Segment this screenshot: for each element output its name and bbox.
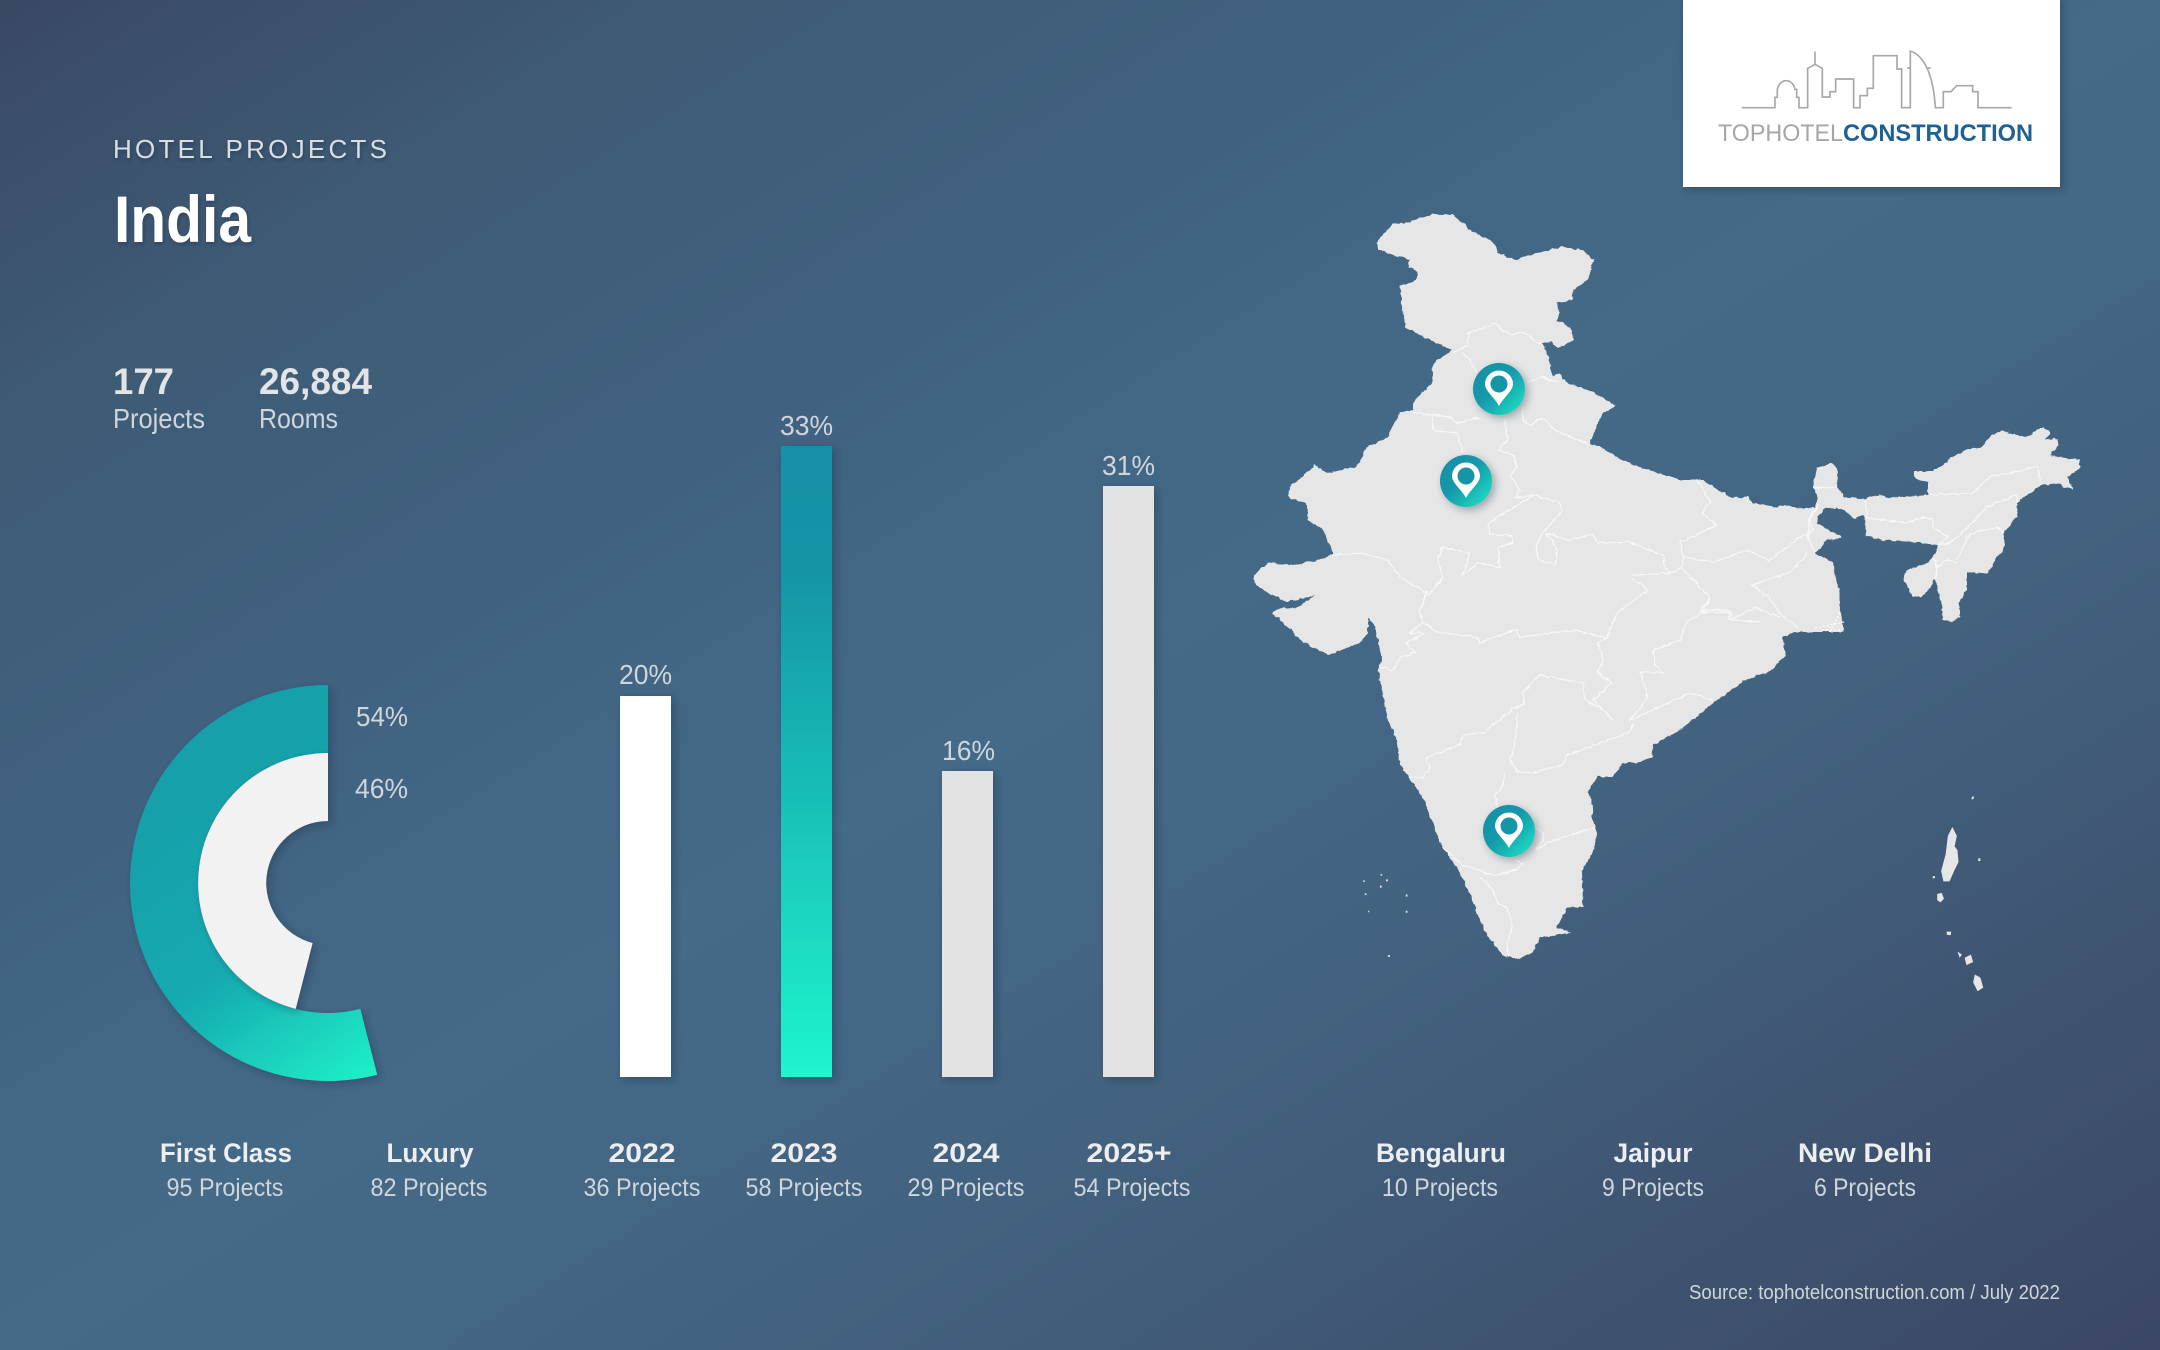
labels: 2024: 29 Projects bbox=[908, 1174, 1024, 1202]
title: India bbox=[114, 182, 252, 256]
labels: luxury: 82 Projects bbox=[370, 1174, 488, 1202]
stat: projects: 177 bbox=[113, 361, 174, 402]
labels: 2023: 58 Projects bbox=[746, 1174, 862, 1202]
labels: luxury bbox=[370, 1138, 488, 1202]
labels: 2025+ bbox=[1074, 1138, 1190, 1202]
logo wordmark: TOPHOTEL bbox=[1718, 120, 1843, 147]
bar 2023 bbox=[781, 446, 832, 1077]
stat: projects: Projects bbox=[113, 403, 205, 434]
labels: bengaluru bbox=[1376, 1138, 1506, 1202]
labels: 2022: 36 Projects bbox=[584, 1174, 700, 1202]
labels: 2023: 2023 bbox=[770, 1138, 838, 1168]
labels: jaipur bbox=[1602, 1138, 1704, 1202]
arc: luxury 46% bbox=[198, 753, 328, 1009]
bar value labels: 31% bbox=[1102, 450, 1155, 481]
label 54%: 54% bbox=[356, 701, 408, 732]
stat: rooms: Rooms bbox=[259, 403, 338, 434]
labels: 2025+: 2025+ bbox=[1086, 1138, 1172, 1168]
pin: jaipur bbox=[1440, 455, 1492, 507]
labels: jaipur: 9 Projects bbox=[1602, 1174, 1704, 1202]
labels: 2025+: 54 Projects bbox=[1074, 1174, 1190, 1202]
labels: 2024: 2024 bbox=[932, 1138, 1000, 1168]
labels: 2023 bbox=[746, 1138, 862, 1202]
sundarbans delta detail bbox=[1815, 612, 1844, 632]
logo panel bbox=[1683, 0, 2060, 187]
arc: first class 54% bbox=[130, 685, 377, 1081]
pin: new delhi bbox=[1473, 363, 1525, 415]
labels: 2024 bbox=[908, 1138, 1024, 1202]
source note: Source: tophotelconstruction.com / July 2022 bbox=[1689, 1282, 2060, 1304]
labels: new delhi bbox=[1798, 1138, 1932, 1202]
label 46%: 46% bbox=[355, 773, 408, 804]
pin: bengaluru bbox=[1483, 805, 1535, 857]
map landmass and state borders bbox=[1252, 214, 2080, 959]
stat: rooms: 26,884 bbox=[259, 361, 372, 402]
logo wordmark: CONSTRUCTION bbox=[1843, 120, 2033, 147]
stat: projects bbox=[113, 361, 205, 434]
bar value labels bbox=[619, 410, 1155, 766]
india map bbox=[1252, 214, 2080, 991]
bar value labels: 33% bbox=[780, 410, 833, 441]
labels: 2022: 2022 bbox=[608, 1138, 676, 1168]
labels: new delhi: New Delhi bbox=[1798, 1138, 1932, 1168]
labels: first class bbox=[160, 1138, 292, 1202]
bar chart bbox=[619, 410, 1155, 1077]
logo skyline icon bbox=[1742, 51, 2012, 108]
stat: rooms bbox=[259, 361, 372, 434]
bar 2022 bbox=[620, 696, 671, 1077]
labels: jaipur: Jaipur bbox=[1614, 1138, 1693, 1168]
eyebrow heading: HOTEL PROJECTS bbox=[113, 134, 387, 164]
labels: new delhi: 6 Projects bbox=[1814, 1174, 1916, 1202]
labels: 2022 bbox=[584, 1138, 700, 1202]
labels: bengaluru: 10 Projects bbox=[1382, 1174, 1498, 1202]
bar 2025+ bbox=[1103, 486, 1154, 1077]
radial donut chart bbox=[130, 685, 408, 1081]
labels: first class: First Class bbox=[160, 1138, 292, 1168]
andaman, nicobar and lakshadweep islands bbox=[1363, 797, 1983, 991]
labels: bengaluru: Bengaluru bbox=[1376, 1138, 1506, 1168]
labels: luxury: Luxury bbox=[386, 1138, 474, 1168]
bar 2024 bbox=[942, 771, 993, 1077]
labels: first class: 95 Projects bbox=[166, 1174, 284, 1202]
bar value labels: 20% bbox=[619, 659, 672, 690]
bar value labels: 16% bbox=[942, 735, 995, 766]
